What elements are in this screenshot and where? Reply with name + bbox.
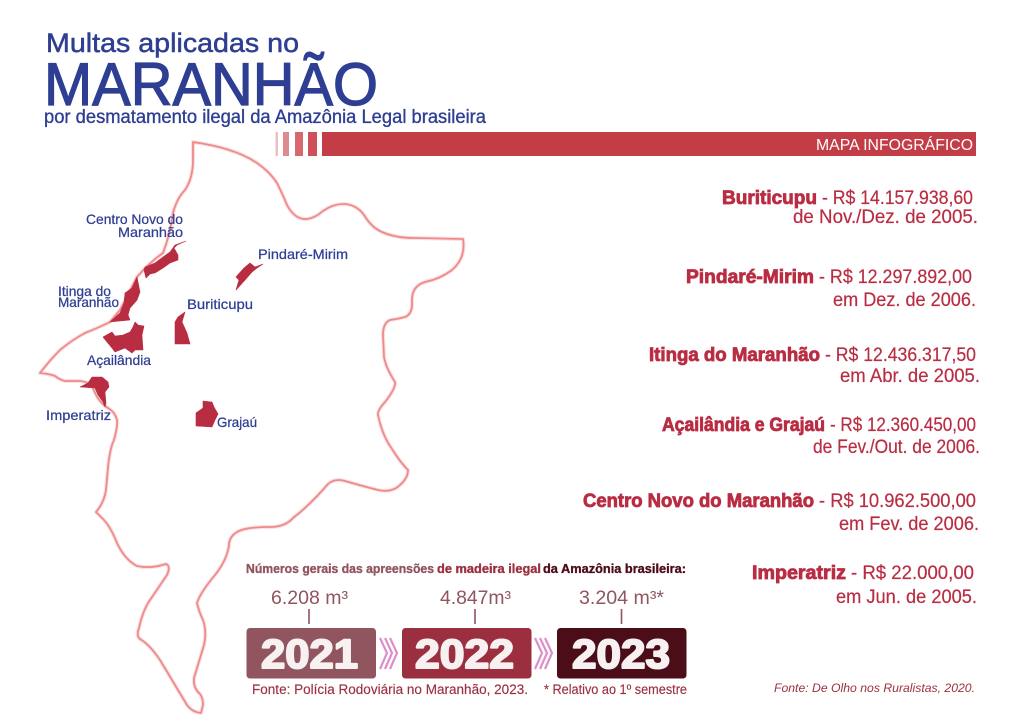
timeline heading: da Amazônia brasileira: (543, 562, 686, 576)
fine: Imperatriz: - R$ 22.000,00 (851, 563, 974, 584)
municipality shapes (80, 241, 263, 427)
map labels (46, 211, 348, 430)
map labels: Imperatriz (46, 407, 111, 423)
fine: Açailândia e Grajaú: - R$ 12.360.450,00 (830, 415, 976, 436)
2023 volume (579, 588, 665, 624)
timeline heading (246, 562, 686, 576)
2021 volume: 6.208 m³ (271, 588, 348, 609)
fine: Buriticupu: Buriticupu (722, 188, 817, 209)
map labels: Maranhão (58, 294, 119, 310)
fine: Pindaré-Mirim: em Dez. de 2006. (833, 290, 976, 311)
fine: Centro Novo do Maranhão (583, 491, 979, 535)
year box 2022: 2022 (415, 631, 514, 677)
timber seizure timeline (246, 562, 687, 697)
header bar: mapa infográfico (276, 132, 976, 156)
fine: Imperatriz: em Jun. de 2005. (836, 587, 977, 608)
state outline (40, 142, 464, 713)
map labels: Itinga do (58, 283, 111, 299)
fine: Açailândia e Grajaú (662, 415, 980, 458)
fine: Açailândia e Grajaú: Açailândia e Grajaú (662, 415, 825, 436)
fine: Imperatriz: Imperatriz (752, 563, 846, 584)
title main word: MARANHÃO (44, 51, 378, 118)
arrow 2021 to 2022 (380, 638, 397, 669)
year box 2021 (246, 628, 376, 678)
2023 volume: 3.204 m³* (579, 588, 665, 609)
fine: Pindaré-Mirim (686, 267, 976, 311)
list of fines by municipality (583, 188, 980, 695)
map of Maranhão (40, 142, 464, 713)
year box 2021: 2021 (261, 631, 358, 677)
map labels: Maranhão (118, 224, 183, 240)
map labels: Pindaré-Mirim (258, 246, 348, 262)
map labels: Buriticupu (187, 296, 253, 312)
timeline footnote: * Relativo ao 1º semestre (544, 682, 687, 697)
arrow 2022 to 2023 (535, 638, 552, 669)
source note: Fonte: De Olho nos Ruralistas, 2020. (774, 683, 975, 695)
fine: Pindaré-Mirim: - R$ 12.297.892,00 (819, 267, 972, 288)
timeline heading: Números gerais das apreensões (246, 562, 434, 576)
map labels: Açailândia (87, 352, 151, 368)
year box 2023 (557, 628, 686, 678)
fine: Pindaré-Mirim: Pindaré-Mirim (686, 267, 814, 288)
fine: Centro Novo do Maranhão: Centro Novo do Maranhão (583, 491, 814, 512)
fine: Imperatriz (752, 563, 977, 608)
map labels: Grajaú (217, 414, 257, 430)
fine: Buriticupu (722, 188, 978, 228)
fine: Itinga do Maranhão: - R$ 12.436.317,50 (825, 345, 976, 366)
fine: Centro Novo do Maranhão: em Fev. de 2006. (839, 514, 979, 535)
timeline heading: de madeira ilegal (437, 562, 541, 576)
2021 volume (271, 588, 348, 624)
2022 volume: 4.847m³ (440, 588, 511, 609)
title line 1: Multas aplicadas no (46, 28, 299, 58)
fine: Itinga do Maranhão (649, 345, 980, 387)
year box 2022 (402, 628, 532, 678)
fine: Açailândia e Grajaú: de Fev./Out. de 2006. (813, 437, 980, 458)
subtitle: por desmatamento ilegal da Amazônia Legal brasileira (44, 107, 486, 128)
fine: Buriticupu: - R$ 14.157.938,60 (822, 188, 973, 209)
fine: Itinga do Maranhão: Itinga do Maranhão (649, 345, 820, 366)
fine: Centro Novo do Maranhão: - R$ 10.962.500,00 (819, 491, 976, 512)
fine: Itinga do Maranhão: em Abr. de 2005. (840, 366, 980, 387)
fine: Buriticupu: de Nov./Dez. de 2005. (793, 207, 978, 228)
map labels: Centro Novo do (86, 211, 183, 227)
2022 volume (440, 588, 511, 624)
title block (44, 28, 486, 128)
header bar: mapa infográfico: MAPA INFOGRÁFICO (816, 137, 973, 154)
timeline source: Fonte: Polícia Rodoviária no Maranhão, 2023. (252, 682, 528, 697)
year box 2023: 2023 (572, 631, 670, 677)
